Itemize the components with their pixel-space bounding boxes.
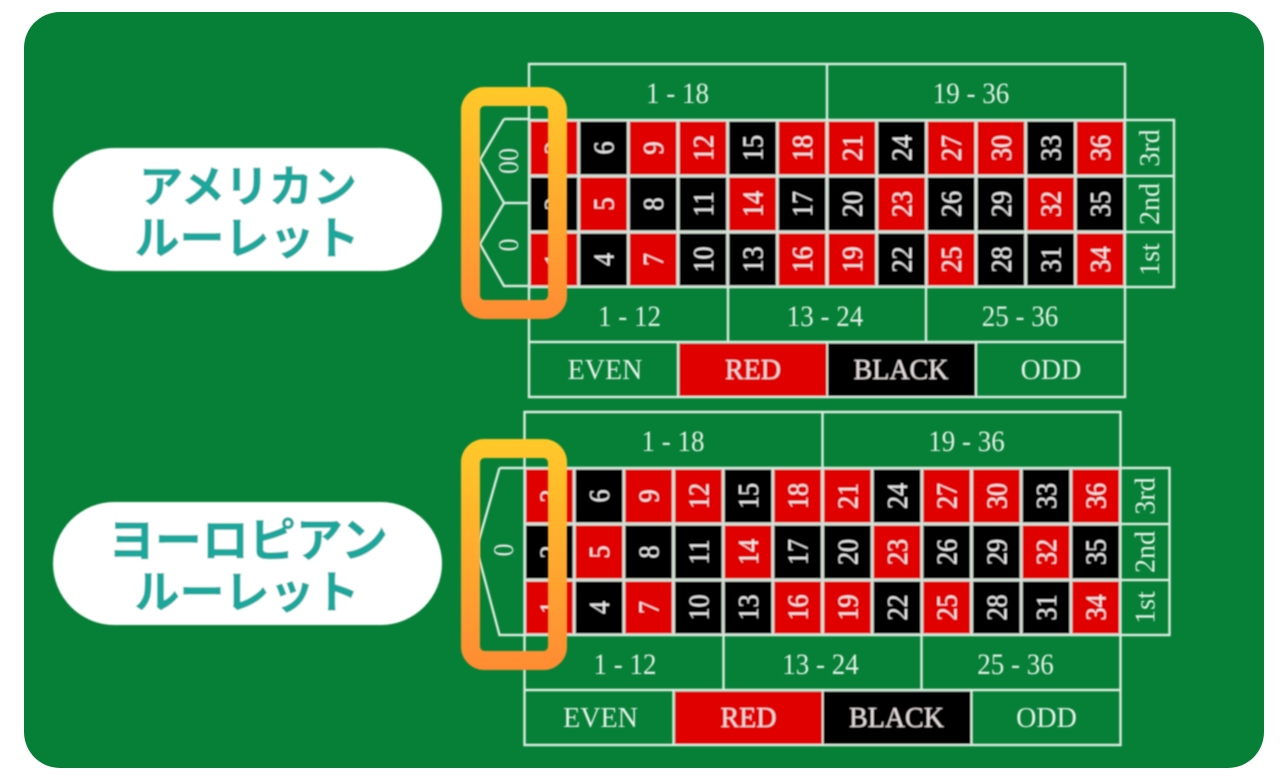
bottom row numbers: 16 bbox=[786, 246, 819, 273]
top row numbers: 24 bbox=[885, 135, 918, 161]
high-low labels: 1 - 18 bbox=[646, 78, 709, 110]
bottom row numbers bbox=[526, 582, 1119, 634]
table outlines bbox=[478, 412, 1170, 745]
dozen labels: 13 - 24 bbox=[787, 301, 863, 333]
label: American roulette bbox=[53, 148, 442, 271]
European roulette betting table bbox=[478, 412, 1170, 745]
middle row numbers: 2 bbox=[538, 197, 570, 211]
top row numbers: 12 bbox=[687, 135, 719, 161]
bottom row numbers: 7 bbox=[632, 601, 665, 614]
dozen labels: 1 - 12 bbox=[598, 301, 661, 333]
top row numbers bbox=[526, 470, 1119, 522]
middle row numbers: 5 bbox=[587, 197, 620, 211]
top row numbers: 21 bbox=[831, 483, 864, 509]
even money bets: EVEN bbox=[563, 703, 638, 734]
dozen labels: 25 - 36 bbox=[977, 649, 1054, 681]
bottom row numbers: 7 bbox=[637, 253, 670, 266]
zero pockets: 0 bbox=[492, 238, 524, 252]
top row numbers: 21 bbox=[836, 135, 868, 161]
column labels bbox=[1135, 129, 1166, 276]
bottom row numbers: 25 bbox=[935, 246, 968, 273]
middle row numbers: 17 bbox=[781, 539, 814, 565]
bottom row numbers: 31 bbox=[1034, 246, 1067, 273]
label: European roulette: ヨーロピアン bbox=[108, 514, 388, 567]
top row numbers: 3 bbox=[533, 489, 566, 503]
middle row numbers bbox=[530, 178, 1124, 230]
bottom row numbers: 4 bbox=[583, 601, 615, 614]
bottom row numbers: 34 bbox=[1084, 246, 1117, 273]
even money bets: BLACK bbox=[849, 703, 944, 734]
middle row numbers: 20 bbox=[836, 191, 868, 217]
even money bets bbox=[563, 692, 1077, 744]
high-low labels: 19 - 36 bbox=[933, 78, 1009, 110]
dozen labels: 1 - 12 bbox=[594, 649, 656, 681]
zero pockets bbox=[492, 148, 524, 252]
top row numbers bbox=[530, 122, 1124, 174]
top row numbers: 18 bbox=[786, 135, 819, 161]
bottom row numbers: 19 bbox=[836, 246, 868, 273]
middle row numbers: 2 bbox=[533, 545, 566, 559]
orange highlight frame: European zero pocket bbox=[470, 448, 558, 660]
middle row numbers: 32 bbox=[1030, 539, 1062, 565]
bottom row numbers: 13 bbox=[732, 594, 764, 621]
bottom row numbers: 31 bbox=[1030, 594, 1062, 621]
bottom row numbers: 1 bbox=[533, 601, 566, 614]
top row numbers: 15 bbox=[736, 135, 769, 161]
middle row numbers: 26 bbox=[935, 191, 968, 217]
top row numbers: 27 bbox=[935, 135, 968, 161]
bottom row numbers: 13 bbox=[736, 246, 769, 273]
high-low labels bbox=[646, 78, 1009, 110]
column labels bbox=[1130, 477, 1162, 624]
top row numbers: 9 bbox=[632, 489, 665, 503]
middle row numbers: 35 bbox=[1079, 539, 1112, 565]
column labels: 2nd bbox=[1130, 531, 1162, 573]
top row numbers: 6 bbox=[587, 141, 620, 155]
column labels: 3rd bbox=[1130, 477, 1162, 515]
top row numbers: 3 bbox=[538, 141, 570, 155]
bottom row numbers bbox=[530, 234, 1124, 286]
bottom row numbers: 22 bbox=[881, 594, 913, 621]
zero pocket: 0 bbox=[487, 543, 519, 557]
bottom row numbers: 16 bbox=[781, 594, 814, 621]
table outlines bbox=[480, 64, 1174, 397]
top row numbers: 6 bbox=[583, 489, 615, 503]
dozen labels: 13 - 24 bbox=[782, 649, 859, 681]
bottom row numbers: 10 bbox=[682, 594, 715, 621]
middle row numbers: 20 bbox=[831, 539, 864, 565]
middle row numbers: 14 bbox=[736, 191, 769, 217]
middle row numbers: 14 bbox=[732, 539, 764, 565]
even money bets: EVEN bbox=[568, 355, 642, 386]
top row numbers: 36 bbox=[1084, 135, 1117, 161]
high-low labels: 1 - 18 bbox=[642, 426, 704, 458]
top row numbers: 15 bbox=[732, 483, 764, 509]
top row numbers: 12 bbox=[682, 483, 715, 509]
middle row numbers: 23 bbox=[885, 191, 918, 217]
bottom row numbers: 4 bbox=[587, 253, 620, 266]
dozen labels bbox=[598, 301, 1058, 333]
label: American roulette: ルーレット bbox=[134, 213, 360, 264]
bottom row numbers: 28 bbox=[980, 594, 1013, 621]
orange highlight frame: American zero pockets bbox=[470, 96, 558, 310]
middle row numbers: 23 bbox=[881, 539, 913, 565]
middle row numbers: 32 bbox=[1034, 191, 1067, 217]
top row numbers: 18 bbox=[781, 483, 814, 509]
top row numbers: 30 bbox=[985, 135, 1017, 161]
bottom row numbers: 1 bbox=[538, 253, 570, 266]
label: American roulette: アメリカン bbox=[139, 163, 357, 212]
even money bets: ODD bbox=[1016, 703, 1077, 734]
even money bets: BLACK bbox=[854, 355, 948, 386]
top row numbers: 33 bbox=[1034, 135, 1067, 161]
middle row numbers: 11 bbox=[682, 539, 715, 565]
bottom row numbers: 28 bbox=[985, 246, 1017, 273]
middle row numbers: 17 bbox=[786, 191, 819, 217]
top row numbers: 30 bbox=[980, 483, 1013, 509]
top row numbers: 33 bbox=[1030, 483, 1062, 509]
bottom row numbers: 19 bbox=[831, 594, 864, 621]
middle row numbers: 11 bbox=[687, 191, 719, 217]
high-low labels: 19 - 36 bbox=[928, 426, 1005, 458]
middle row numbers bbox=[526, 526, 1119, 578]
bottom row numbers: 10 bbox=[687, 246, 719, 273]
dozen labels: 25 - 36 bbox=[982, 301, 1058, 333]
even money bets bbox=[568, 344, 1081, 396]
bottom row numbers: 25 bbox=[930, 594, 963, 621]
high-low labels bbox=[642, 426, 1005, 458]
column labels: 2nd bbox=[1135, 183, 1166, 225]
top row numbers: 36 bbox=[1079, 483, 1112, 509]
bottom row numbers: 34 bbox=[1079, 594, 1112, 621]
dozen labels bbox=[594, 649, 1054, 681]
middle row numbers: 26 bbox=[930, 539, 963, 565]
column labels: 1st bbox=[1135, 243, 1166, 276]
middle row numbers: 29 bbox=[985, 191, 1017, 217]
top row numbers: 24 bbox=[881, 483, 913, 509]
middle row numbers: 29 bbox=[980, 539, 1013, 565]
column labels: 1st bbox=[1130, 591, 1162, 624]
even money bets: RED bbox=[720, 703, 776, 734]
label: European roulette: ルーレット bbox=[134, 567, 360, 618]
American roulette betting table bbox=[480, 64, 1174, 397]
even money bets: ODD bbox=[1021, 355, 1081, 386]
zero pockets: 00 bbox=[492, 148, 524, 174]
even money bets: RED bbox=[725, 355, 781, 386]
middle row numbers: 35 bbox=[1084, 191, 1117, 217]
middle row numbers: 5 bbox=[583, 545, 615, 559]
top row numbers: 9 bbox=[637, 141, 670, 155]
label: European roulette bbox=[53, 502, 442, 625]
top row numbers: 27 bbox=[930, 483, 963, 509]
column labels: 3rd bbox=[1135, 129, 1166, 167]
middle row numbers: 8 bbox=[632, 545, 665, 559]
bottom row numbers: 22 bbox=[885, 246, 918, 273]
middle row numbers: 8 bbox=[637, 197, 670, 211]
